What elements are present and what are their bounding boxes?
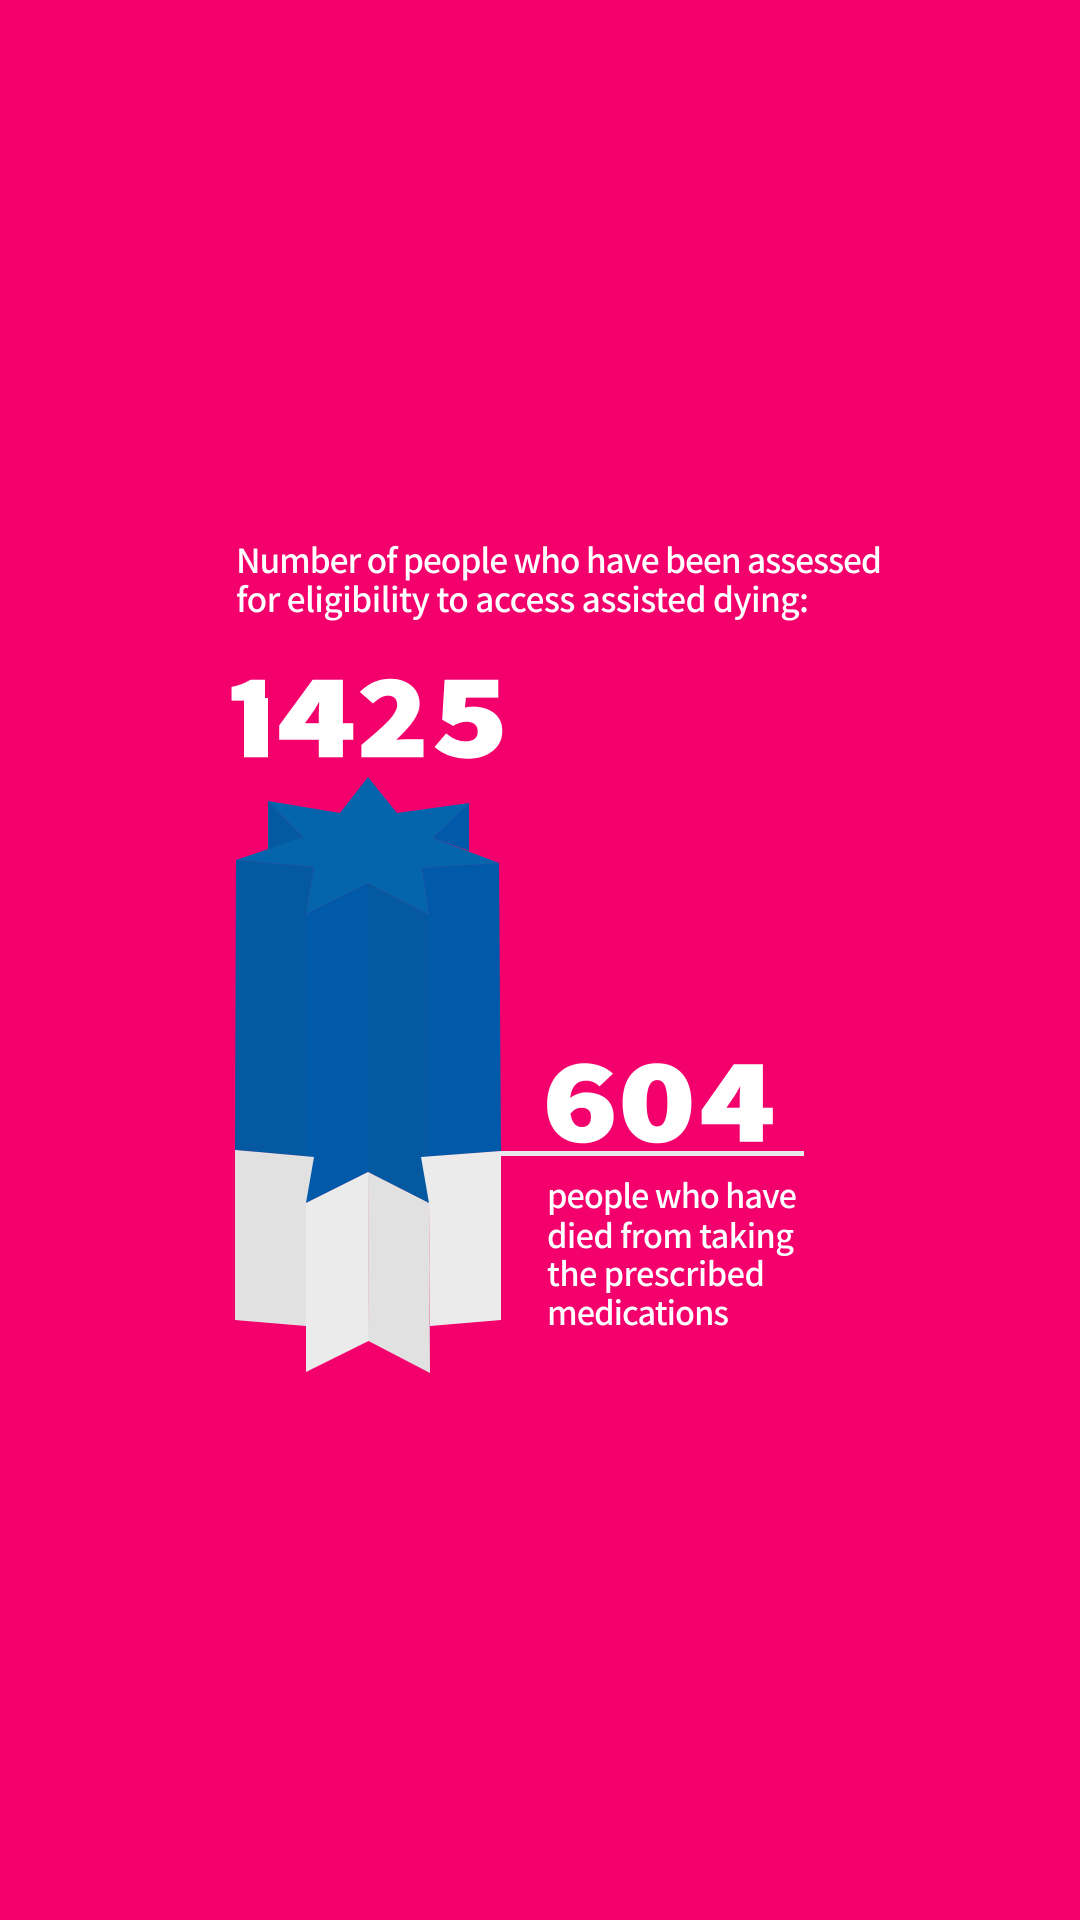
blue column: 1425 assessed	[235, 860, 501, 1203]
number: 1425: 4	[278, 637, 355, 786]
text: people who have died: died from taking	[547, 1211, 794, 1258]
number: 604: 4	[700, 1022, 774, 1170]
text: people who have died: people who have	[547, 1171, 797, 1218]
number: 604	[543, 1022, 774, 1170]
star column chart	[235, 777, 501, 1373]
number: 1425: 1	[223, 637, 283, 786]
number: 1425: 2	[358, 637, 428, 786]
heading: assessed for eligibility: for eligibility to access assisted dying:	[236, 573, 809, 622]
heading: assessed for eligibility: Number of people who have been assessed	[236, 534, 882, 583]
white column: 604 died	[235, 1150, 501, 1373]
leader line	[501, 1151, 804, 1156]
number: 604: 6	[543, 1022, 617, 1170]
text: people who have died: the prescribed	[547, 1249, 765, 1296]
number: 1425: 5	[434, 637, 508, 786]
number: 604: 0	[619, 1022, 695, 1170]
text: people who have died: medications	[547, 1288, 729, 1335]
heading: assessed for eligibility	[236, 534, 882, 622]
back points of star column	[268, 801, 469, 851]
star top face	[236, 777, 499, 915]
number: 1425	[223, 637, 508, 786]
text: people who have died	[547, 1171, 797, 1335]
